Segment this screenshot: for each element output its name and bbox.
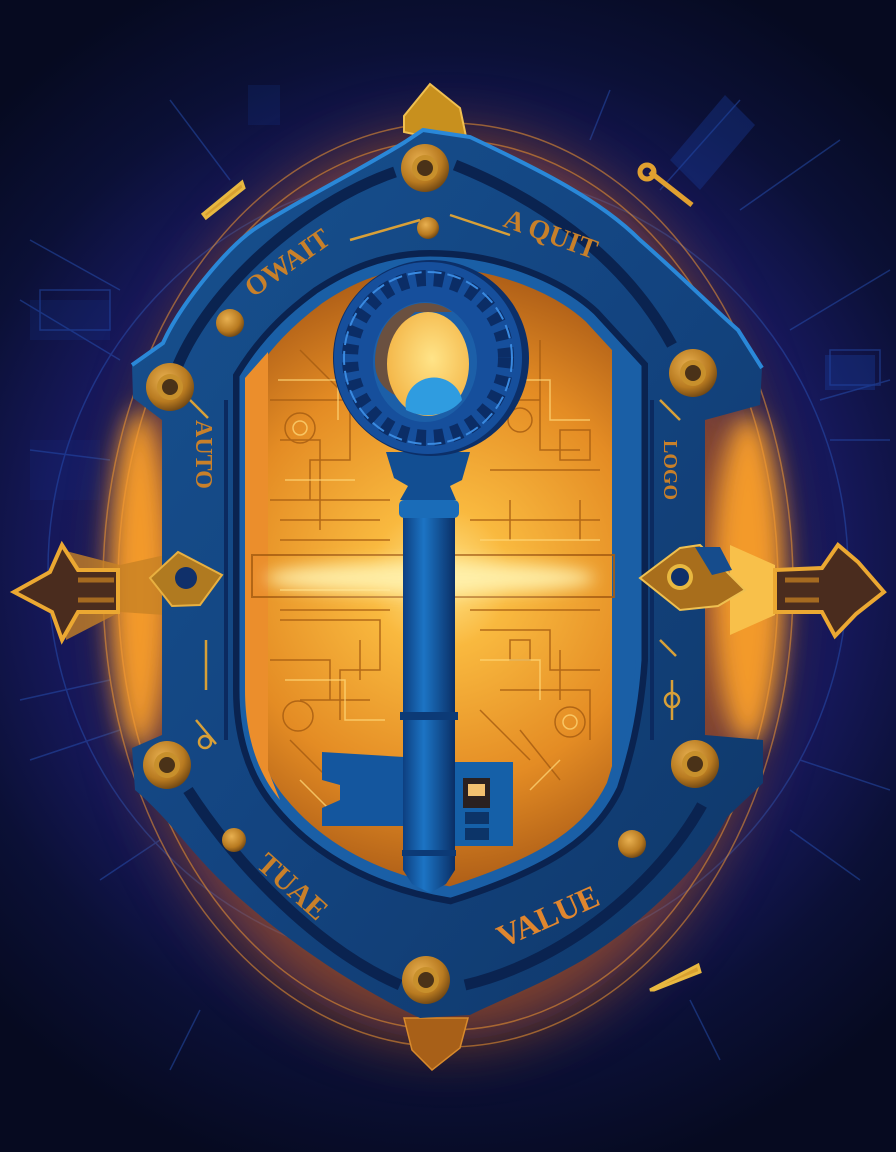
orange glow behind door <box>126 140 770 1040</box>
gold tag lower right <box>650 965 700 990</box>
frame engraved text: TUAE <box>250 847 334 927</box>
key shaft <box>403 505 455 893</box>
left latch <box>14 545 165 640</box>
key collar <box>386 452 470 500</box>
frame grooves <box>178 165 702 985</box>
frame engraved text: AUTO <box>190 420 216 489</box>
small gold tag upper left <box>203 182 244 218</box>
left eye clamp <box>150 552 222 606</box>
top ornament <box>404 84 468 146</box>
small gold key icon upper right <box>640 165 692 205</box>
right latch <box>730 545 884 636</box>
frame engraved text: OWAIT <box>239 223 336 304</box>
gold bolts <box>143 144 719 1004</box>
key <box>322 260 529 893</box>
key hole <box>373 302 477 422</box>
key bit left <box>322 752 404 826</box>
key ring <box>333 260 529 456</box>
frame engraved text <box>190 203 681 954</box>
key bit right <box>450 762 513 846</box>
side glow panels <box>110 410 784 750</box>
right eye clamp <box>640 545 745 610</box>
door opening <box>245 262 636 892</box>
door right wall <box>612 350 636 785</box>
frame engraved text: A QUIT <box>500 203 602 266</box>
circuit highlights <box>278 380 600 820</box>
frame gold specks <box>190 215 680 748</box>
door left wall <box>245 352 280 800</box>
frame side rails <box>226 400 652 740</box>
glowing halo rings <box>103 123 793 1047</box>
frame engraved text: LOGO <box>659 440 681 500</box>
circuit pattern <box>252 340 614 780</box>
vault frame <box>132 130 763 1018</box>
bottom ornament <box>404 1018 468 1070</box>
frame engraved text: VALUE <box>491 878 604 954</box>
central light burst <box>265 562 595 594</box>
blueprint panels <box>30 85 875 500</box>
